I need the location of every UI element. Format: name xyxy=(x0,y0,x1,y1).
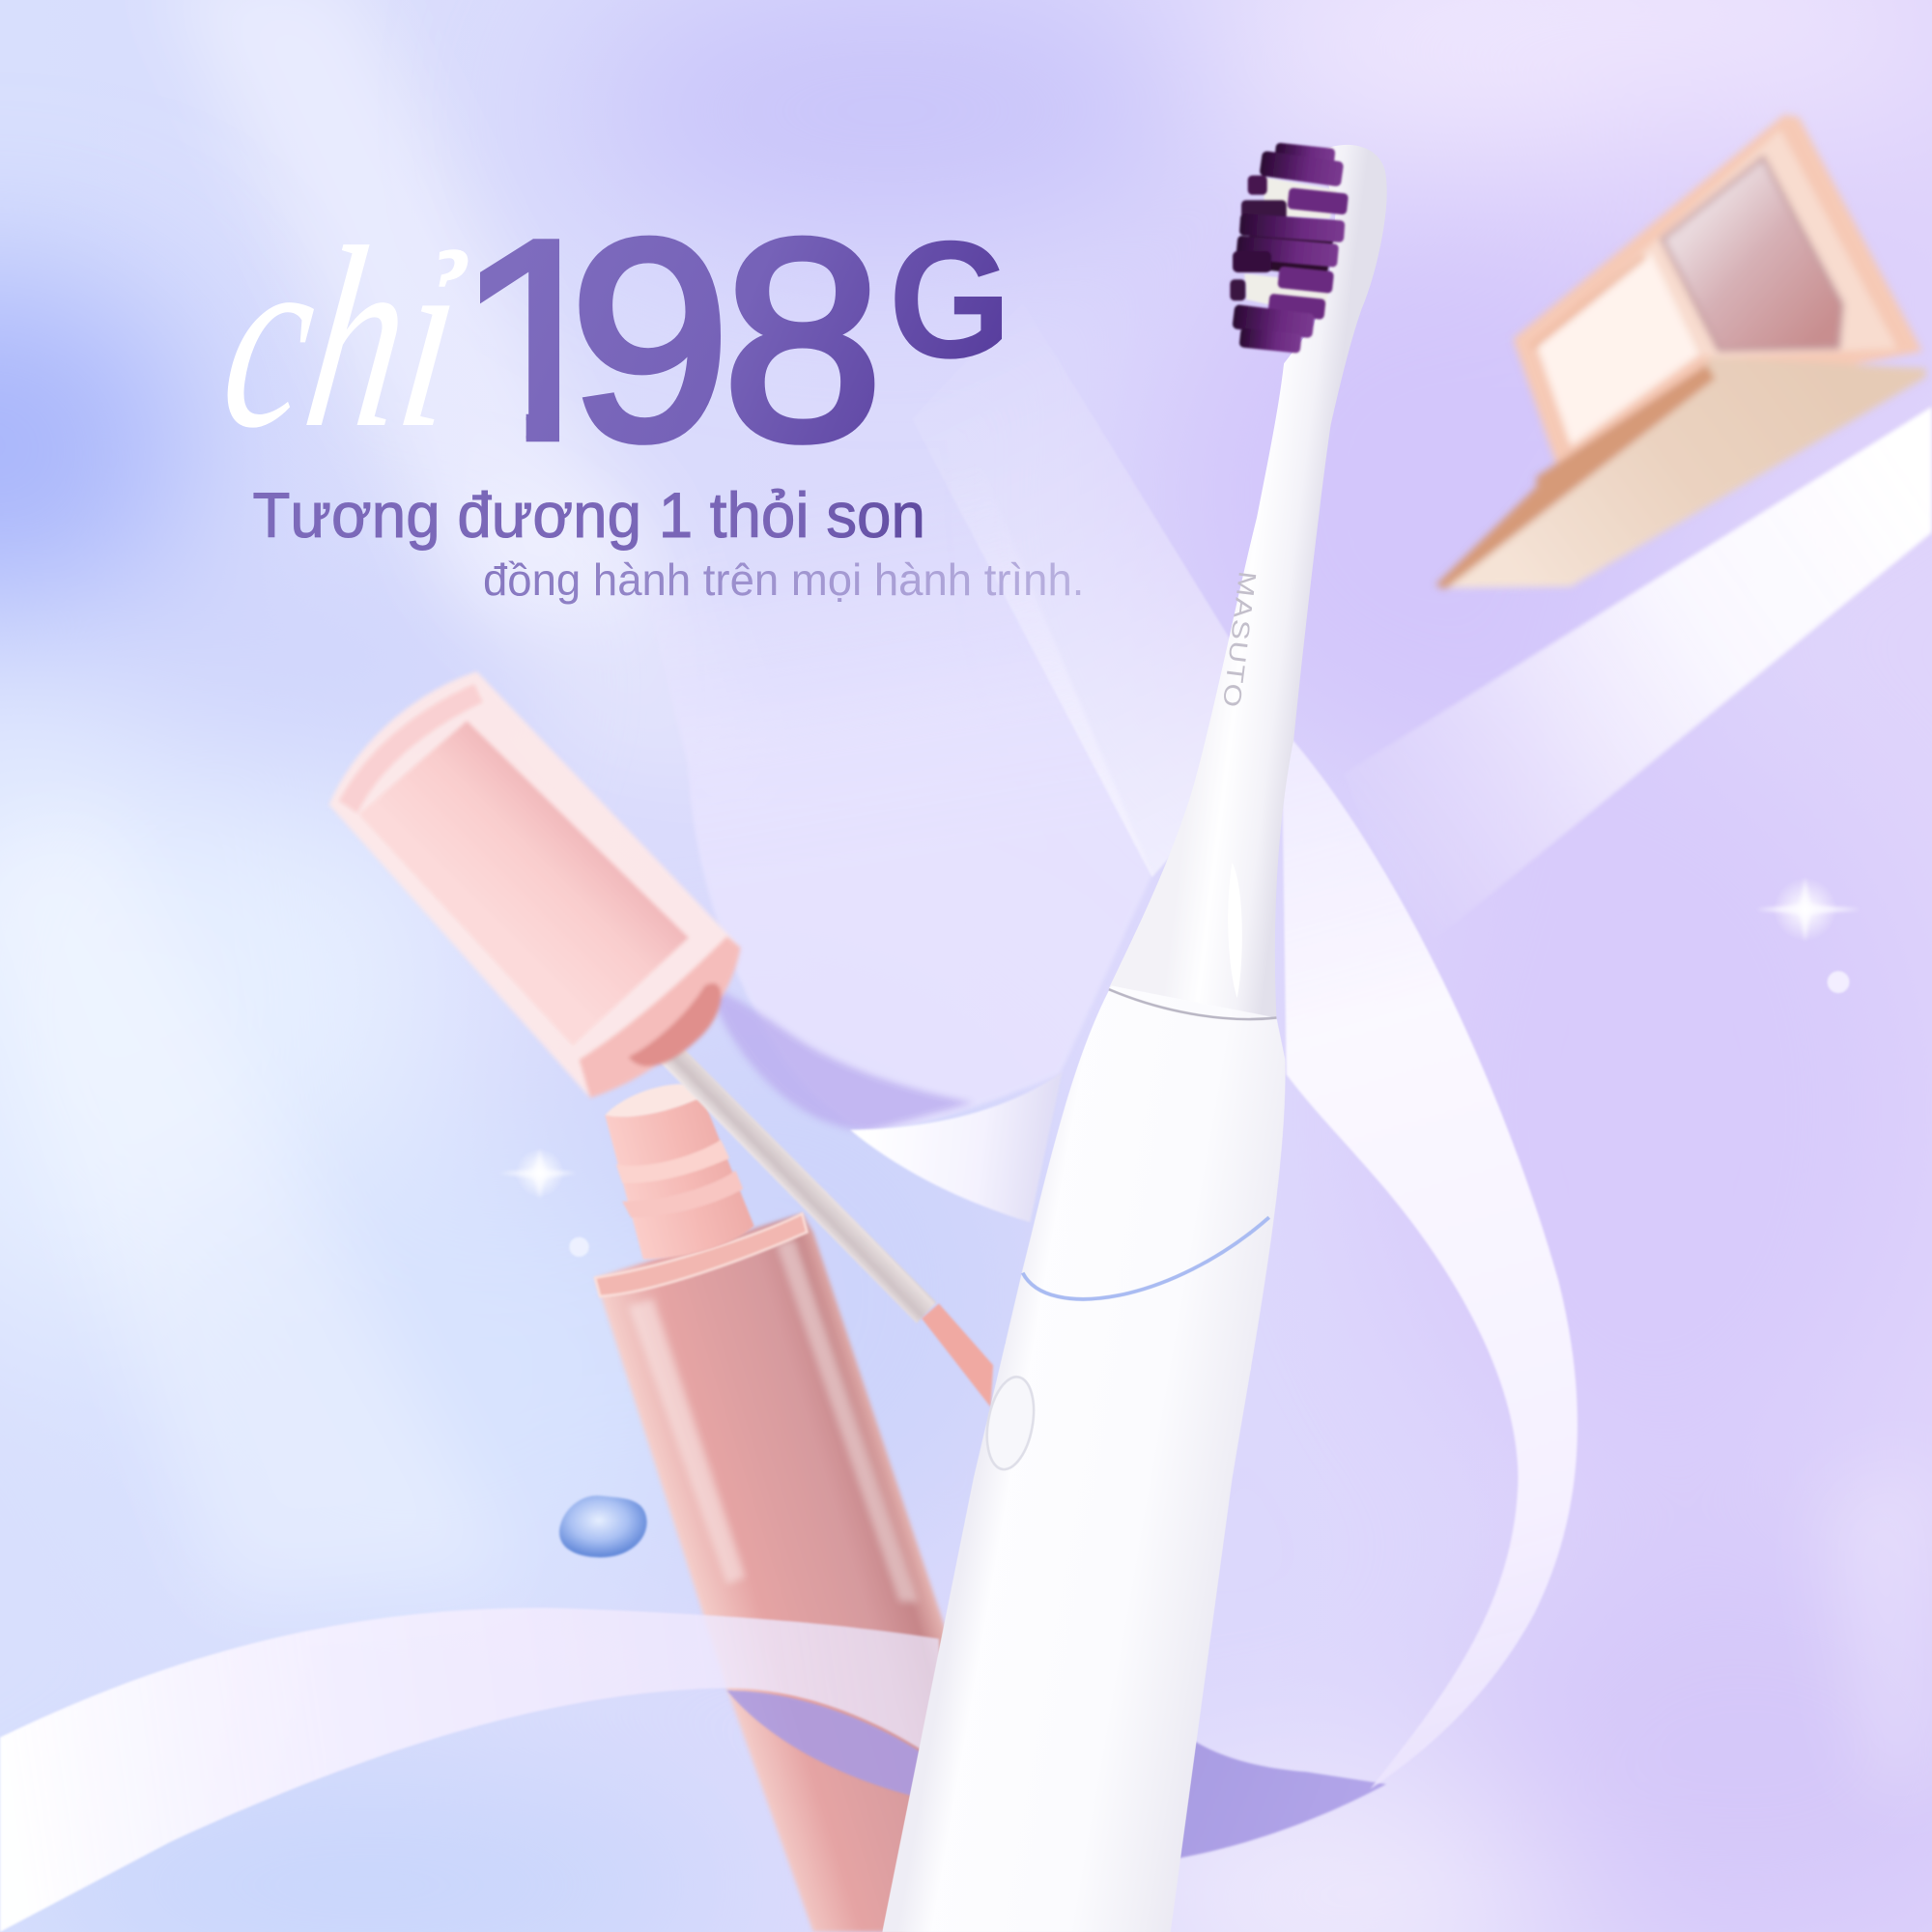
lipstick tube highlight xyxy=(629,1298,746,1584)
ribbon: right band xyxy=(1343,407,1932,955)
ribbon: upper band rising behind toothbrush xyxy=(912,301,1284,877)
number: 198: 8 xyxy=(722,180,884,499)
toothbrush neck highlight xyxy=(1228,863,1242,998)
number: 198 xyxy=(480,236,875,445)
lipstick applicator tip xyxy=(922,1303,993,1407)
toothbrush button xyxy=(980,1373,1040,1473)
title: chỉ 198G xyxy=(228,236,1002,445)
compact powder case xyxy=(1435,115,1926,589)
subtitle: Tương đương 1 thỏi son xyxy=(252,480,925,552)
lipstick neck and threads xyxy=(605,1084,754,1260)
lipstick tube xyxy=(595,1213,949,1932)
compact orange edge xyxy=(1435,365,1716,589)
toothbrush xyxy=(882,142,1387,1932)
ribbon: translucent lilac panel behind lipstick xyxy=(640,419,1152,1130)
ribbon: lower left band xyxy=(0,1607,943,1932)
compact base plate xyxy=(1445,357,1926,587)
ribbon: purple underside lower right xyxy=(1164,1735,1386,1861)
ribbon: purple fold shadow xyxy=(708,985,974,1131)
compact lid xyxy=(1513,115,1922,470)
script word: chỉ: chỉ xyxy=(209,193,478,482)
number: 198: 1 xyxy=(453,180,627,499)
toothbrush head and neck xyxy=(1109,145,1387,1018)
toothbrush indicator line xyxy=(1023,1217,1269,1299)
toothbrush seam xyxy=(1109,989,1276,1019)
lipstick xyxy=(329,671,993,1932)
ribbon: lower left purple underside xyxy=(727,1690,943,1802)
unit: G: G xyxy=(889,206,1011,393)
number: 198: 9 xyxy=(569,180,730,499)
toothbrush brand: MASUTO xyxy=(1217,570,1261,710)
icon: water drop xyxy=(559,1495,647,1557)
compact mirror xyxy=(1662,157,1842,350)
lipstick shoulder rim xyxy=(595,1213,807,1296)
toothbrush body xyxy=(882,985,1286,1932)
toothbrush bristles xyxy=(1230,142,1349,354)
sparkle: upper right xyxy=(1756,877,1861,993)
ribbon: white fold xyxy=(850,1072,1062,1222)
ribbon: large white sweep xyxy=(1282,727,1577,1789)
tagline: đồng hành trên mọi hành trình. xyxy=(483,554,1084,605)
lipstick cap xyxy=(329,671,741,1097)
sparkle: left xyxy=(499,1149,589,1257)
compact powder pad xyxy=(1537,252,1699,446)
lipstick wand xyxy=(636,1018,936,1323)
